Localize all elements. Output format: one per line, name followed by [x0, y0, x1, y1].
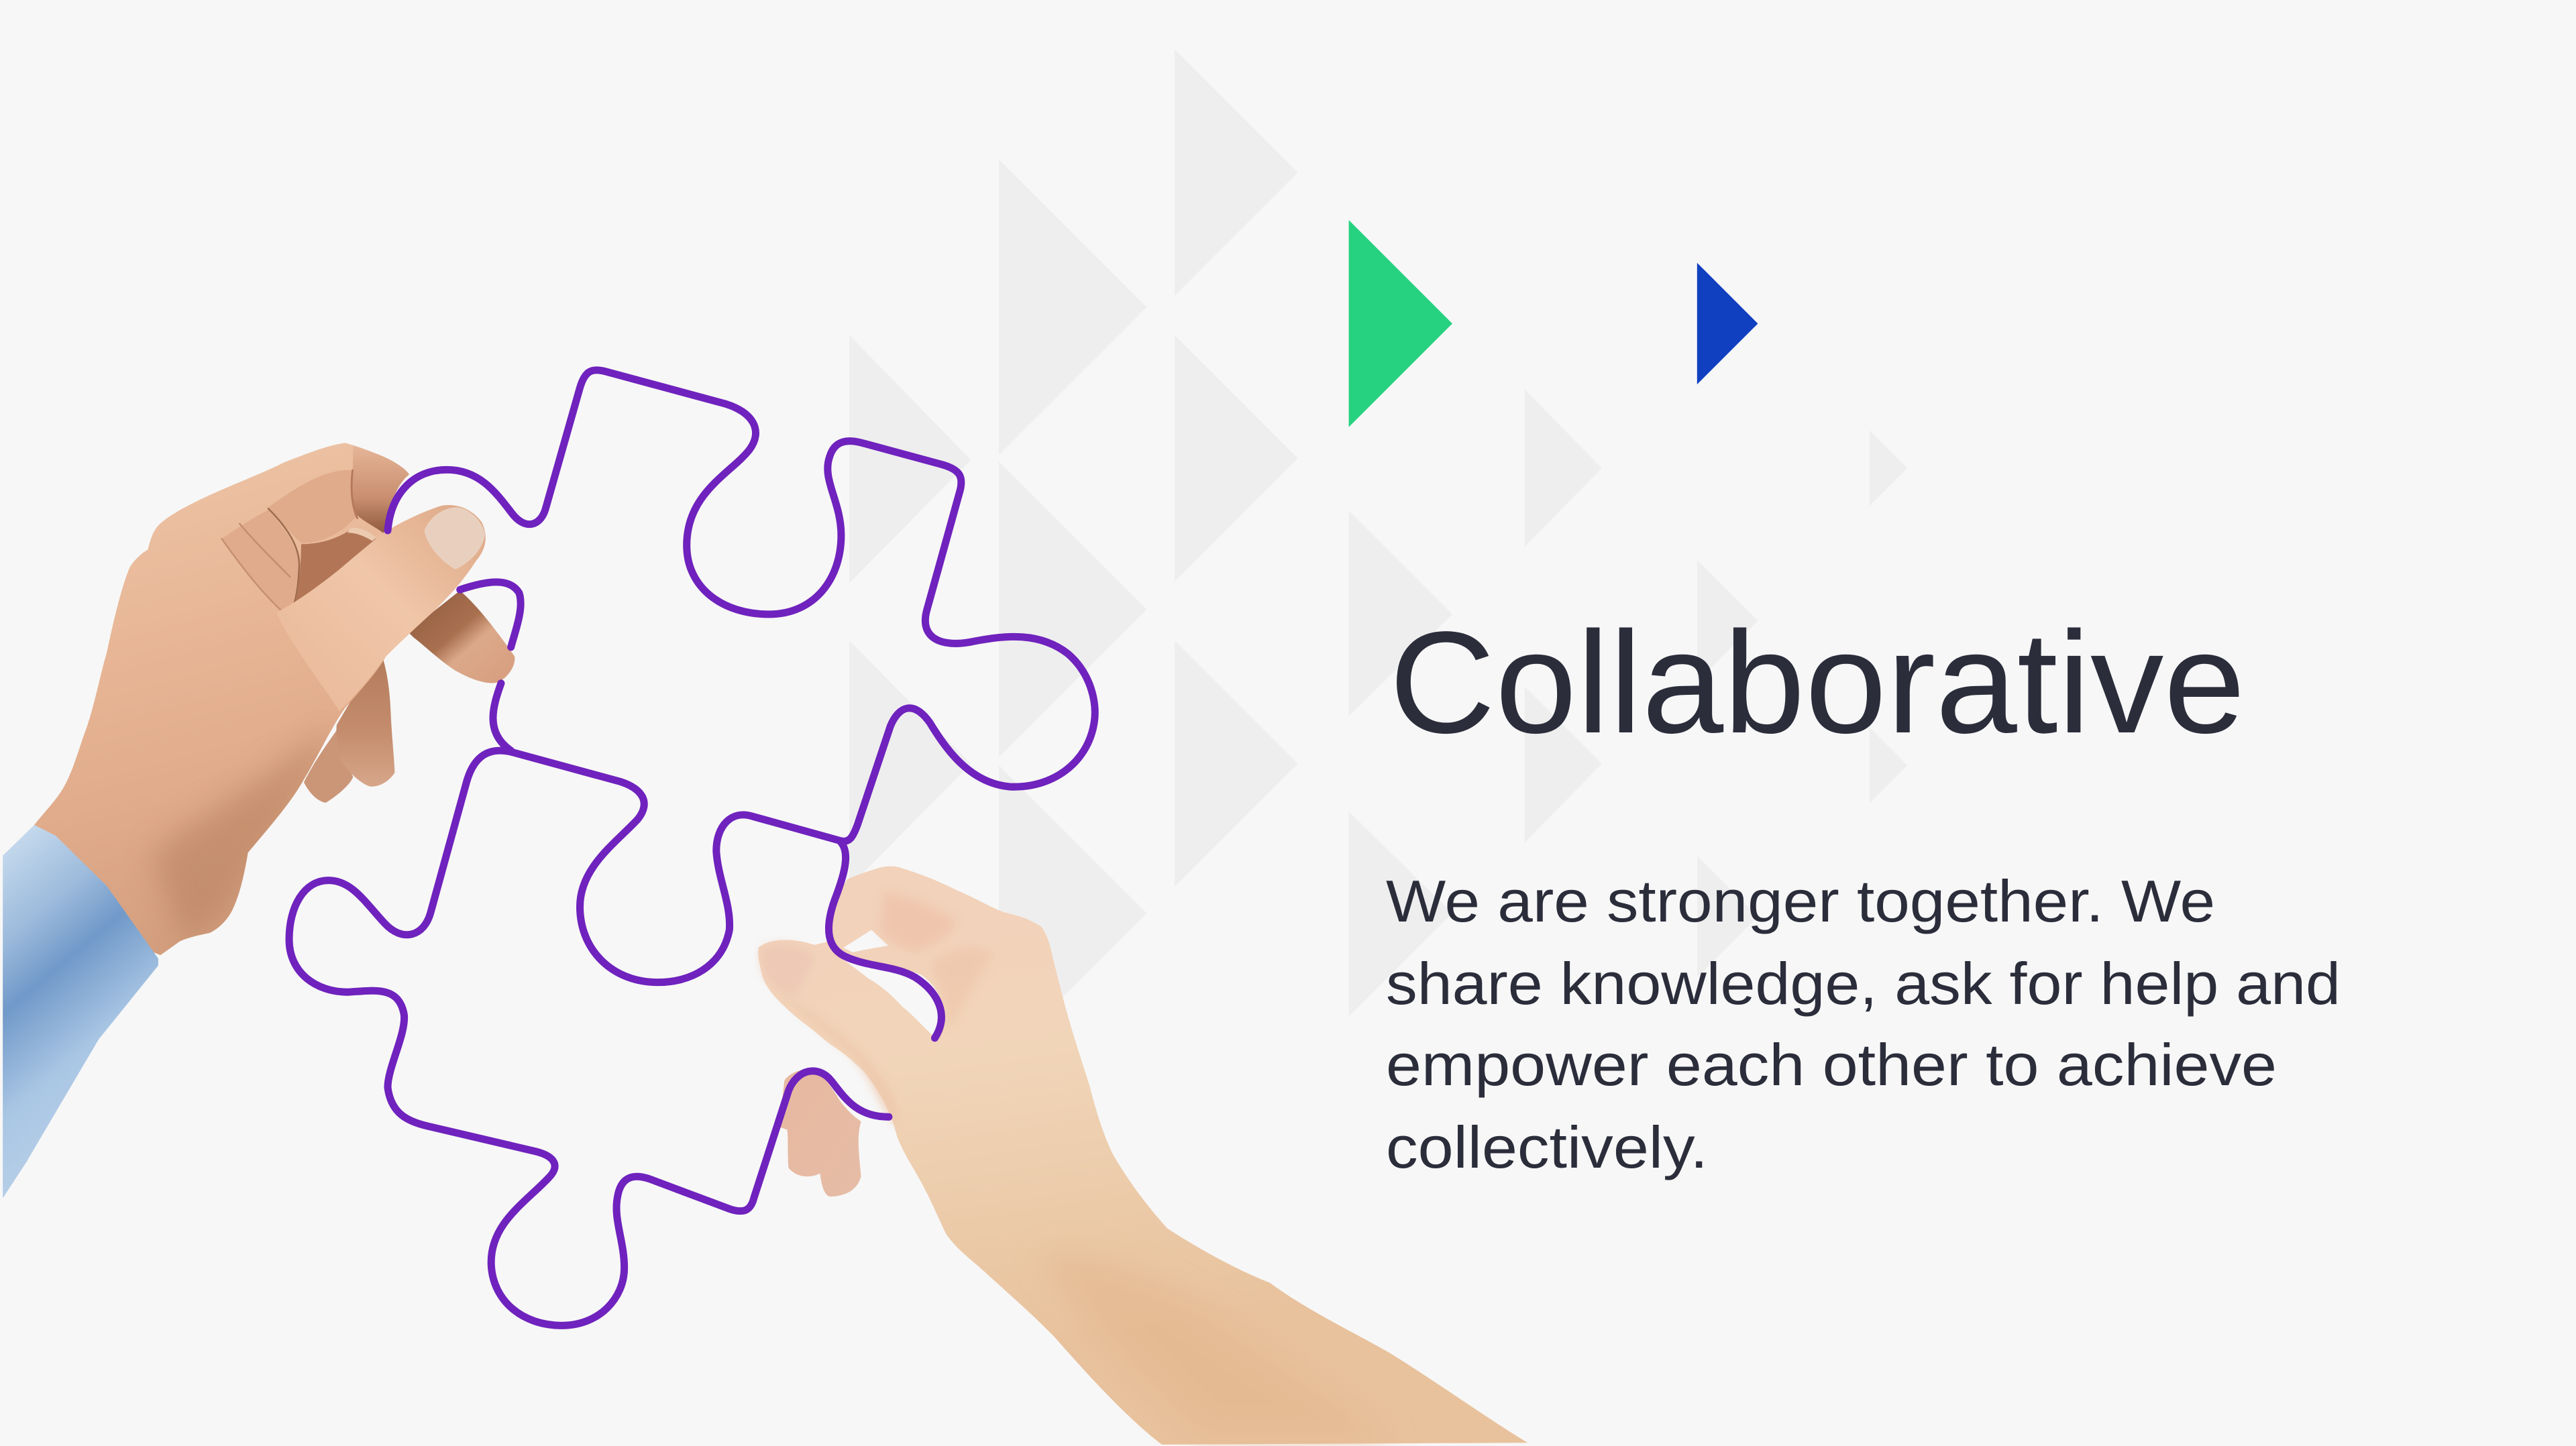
knuckle segment [352, 445, 409, 533]
green triangle [1349, 220, 1452, 427]
line 2: share knowledge, ask for help and [1386, 950, 2341, 1017]
puzzle segment by left finger [460, 582, 521, 647]
line 4: collectively. [1386, 1114, 1708, 1180]
palm crease lines [222, 470, 358, 611]
right thumbnail [761, 944, 814, 995]
line 1: We are stronger together. We [1386, 868, 2215, 934]
curled finger shading [268, 470, 356, 543]
forearm shading [1039, 1255, 1395, 1441]
index finger shading [880, 891, 957, 952]
puzzle outline [289, 370, 1095, 1325]
right hand [758, 867, 1527, 1445]
puzzle segment by right hand [828, 842, 941, 1038]
back of hand [34, 443, 409, 955]
rear fingers [779, 1069, 861, 1197]
folded dark finger [294, 530, 376, 606]
thumbnail [424, 507, 485, 569]
palm crease pad [222, 510, 299, 611]
line 3: empower each other to achieve [1386, 1032, 2277, 1098]
cuff [3, 825, 158, 1198]
folded finger highlight [347, 528, 376, 541]
hand shadow [150, 732, 332, 944]
left hand with blue cuff [3, 443, 515, 1198]
palm crease [930, 946, 996, 1028]
thumb [276, 505, 486, 711]
body text [1386, 868, 2341, 1180]
title: Collaborative [1389, 601, 2245, 763]
hand and forearm [758, 867, 1527, 1445]
triangle pattern [849, 49, 1907, 1061]
middle finger [408, 591, 515, 683]
puzzle segment below left finger [493, 683, 511, 750]
thumb shading [771, 987, 898, 1127]
grey triangles [849, 49, 1907, 1061]
ring finger [336, 651, 394, 787]
puzzle main contour [289, 370, 1095, 1325]
little finger [304, 730, 353, 803]
blue triangle [1697, 263, 1758, 384]
